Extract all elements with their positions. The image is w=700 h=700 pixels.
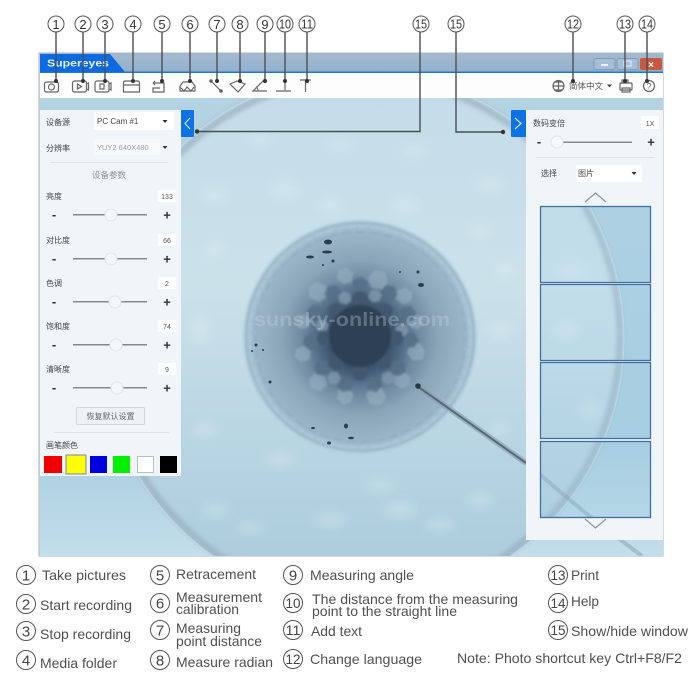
callout 6 <box>182 16 198 83</box>
legend 3: Stop recording <box>40 626 131 642</box>
callout 3 <box>97 16 113 83</box>
callout 11 <box>299 16 315 83</box>
panel: left camera settings <box>40 110 181 476</box>
toolbar <box>40 73 663 98</box>
callout 15 left: 15 <box>415 16 427 32</box>
legend 3 <box>16 622 131 642</box>
legend 6: Measurement <box>176 589 262 605</box>
icon: stop record <box>95 81 111 92</box>
legend 1: 1 <box>22 568 30 584</box>
legend 14 <box>548 593 599 612</box>
legend 3: 3 <box>22 624 30 640</box>
icon: folder <box>124 81 140 92</box>
icon: point distance <box>210 80 222 92</box>
callout 6: 6 <box>186 17 194 32</box>
slider: brightness: + <box>163 208 171 222</box>
legend 9 <box>284 566 414 584</box>
slider: hue: 色调 <box>46 278 62 288</box>
legend 12: 12 <box>286 651 301 667</box>
legend 6: 6 <box>156 596 164 612</box>
legend 2: 2 <box>22 596 30 614</box>
legend 11: Add text <box>311 623 362 639</box>
thumbnail 3 <box>540 362 650 438</box>
slider: sharpness: - <box>52 380 56 395</box>
legend 4: Media folder <box>40 655 117 671</box>
slider: contrast <box>46 234 176 266</box>
slider: saturation <box>46 320 176 352</box>
legend 5: Retracement <box>176 566 256 582</box>
button: hide left panel <box>181 110 194 137</box>
legend 2: Start recording <box>40 597 132 613</box>
callout 4: 4 <box>129 17 137 32</box>
window buttons <box>594 58 662 71</box>
egg cell <box>243 220 477 454</box>
legend 1 <box>16 566 126 584</box>
slider: sharpness: 9 <box>165 367 169 374</box>
logo tab <box>40 54 125 72</box>
resolution row: 分辨率 <box>46 143 70 153</box>
icon: record <box>72 81 88 92</box>
legend 7: Measuring <box>176 620 241 636</box>
slider: contrast: 对比度 <box>46 235 70 245</box>
icon: retracement <box>153 81 164 92</box>
callout 7 <box>209 16 225 83</box>
panel: right zoom and gallery <box>526 110 663 540</box>
select media type: 图片 <box>578 168 594 178</box>
select media type <box>541 165 642 182</box>
callout 9: 9 <box>261 17 269 32</box>
callout 5: 5 <box>158 17 166 32</box>
pen colour swatches: 画笔颜色 <box>46 440 78 450</box>
callout 10: 10 <box>279 16 291 32</box>
chevron up <box>585 193 606 202</box>
select media type: 选择 <box>541 168 557 178</box>
callout 15 left <box>195 16 429 134</box>
device source row: PC Cam #1 <box>97 117 139 126</box>
reset button <box>76 408 144 424</box>
section heading: 设备参数 <box>92 170 126 180</box>
legend <box>16 566 689 671</box>
callout 14: 14 <box>641 16 653 32</box>
legend 6: calibration <box>176 601 239 617</box>
icon: camera <box>44 82 58 92</box>
legend 10: 10 <box>286 595 301 611</box>
callout 5 <box>154 16 170 83</box>
dark facets <box>302 275 421 395</box>
callout 10 <box>277 16 293 83</box>
slider: brightness: - <box>52 207 56 222</box>
icon: help <box>644 80 654 92</box>
slider: contrast: 66 <box>163 238 171 245</box>
legend 15: 15 <box>550 622 566 638</box>
legend 11 <box>284 620 362 640</box>
watermark: sunsky-online.com <box>254 310 450 331</box>
legend 9: 9 <box>289 568 297 584</box>
slider: hue: + <box>163 294 171 310</box>
mid facets <box>293 266 427 410</box>
callout 8: 8 <box>236 17 244 32</box>
callout 2: 2 <box>79 17 87 32</box>
digital zoom <box>533 116 659 150</box>
legend 10 <box>284 591 518 619</box>
needle ghost behind gallery <box>526 463 642 556</box>
slider: brightness <box>46 190 176 222</box>
legend 6 <box>150 589 262 617</box>
digital zoom: - <box>537 134 541 149</box>
legend 14: Help <box>571 593 599 609</box>
resolution row: YUY2 640X480 <box>97 143 149 152</box>
icon: line distance <box>276 81 291 91</box>
slider: sharpness: + <box>163 380 171 396</box>
reset button: 恢复默认设置 <box>86 411 134 421</box>
slider: contrast: - <box>52 251 56 266</box>
legend 12 <box>284 650 422 668</box>
digital zoom: 1X <box>646 121 655 128</box>
legend 12: Change language <box>310 651 422 667</box>
legend 10: point to the straight line <box>312 603 457 619</box>
legend 8: 8 <box>156 652 164 670</box>
callout 2 <box>75 16 91 83</box>
software window <box>39 53 663 603</box>
pale texture patches <box>190 134 600 533</box>
callout 9 <box>257 16 273 83</box>
callout 4 <box>125 16 141 83</box>
button: hide right panel <box>511 110 526 137</box>
logo tab: Supereyes <box>47 58 109 70</box>
shortcut note: Note: Photo shortcut key Ctrl+F8/F2 <box>457 650 682 666</box>
dish rim <box>139 98 624 556</box>
callout 1: 1 <box>52 17 60 32</box>
callout 13: 13 <box>619 16 631 32</box>
slider: saturation: - <box>52 337 56 352</box>
thumbnail 4 <box>540 442 650 518</box>
icon: angle <box>253 80 267 91</box>
callouts: toolbar numbers with leader lines <box>48 16 655 134</box>
thumbnail 2 <box>540 284 650 360</box>
slider: brightness: 133 <box>161 194 173 201</box>
slider: sharpness: 清晰度 <box>46 364 70 374</box>
microscope photo <box>40 98 663 556</box>
slider: brightness: 亮度 <box>46 191 62 201</box>
legend 15: Show/hide window <box>571 623 689 639</box>
slider: saturation: 74 <box>163 324 171 331</box>
callout 12: 12 <box>567 16 579 32</box>
callout 1 <box>48 16 64 83</box>
callout 3: 3 <box>101 17 109 32</box>
legend 10: The distance from the measuring <box>312 591 518 607</box>
thumbnail 1 <box>540 206 650 282</box>
slider: contrast: + <box>163 252 171 266</box>
window buttons: × <box>648 60 654 71</box>
slider: saturation: 饱和度 <box>46 321 70 331</box>
slider: sharpness <box>46 363 176 396</box>
digital zoom: + <box>647 134 655 150</box>
legend 15 <box>548 620 689 640</box>
icon: help: ? <box>646 82 652 92</box>
slider: hue <box>46 277 176 310</box>
legend 7 <box>150 620 262 649</box>
icon: globe <box>553 80 564 92</box>
legend 13: Print <box>571 567 599 583</box>
legend 4 <box>16 650 117 671</box>
callout 13 <box>617 16 633 83</box>
icon: printer <box>620 80 632 92</box>
callout 7: 7 <box>213 17 221 32</box>
legend 9: Measuring angle <box>310 567 414 583</box>
language label: 简体中文 <box>569 81 603 91</box>
title bar <box>40 53 663 73</box>
legend 11: 11 <box>286 622 301 638</box>
callout 15 right <box>448 16 505 134</box>
slider: hue: - <box>52 294 56 309</box>
resolution row <box>46 139 168 155</box>
chevron down <box>585 519 606 528</box>
callout 11: 11 <box>301 16 313 32</box>
callout 14 <box>639 16 655 83</box>
injection needle <box>415 383 526 463</box>
legend 8 <box>150 650 273 670</box>
legend 4: 4 <box>22 652 30 670</box>
legend 7: point distance <box>176 633 262 649</box>
pen colour swatches <box>44 440 177 474</box>
icon: add text <box>300 80 311 92</box>
device source row <box>46 112 174 130</box>
legend 2 <box>16 594 132 614</box>
callout 15 right: 15 <box>450 16 462 32</box>
device source row: 设备源 <box>46 117 70 127</box>
legend 1: Take pictures <box>42 567 126 583</box>
legend 5 <box>150 566 256 584</box>
legend 13: 13 <box>550 567 566 583</box>
legend 8: Measure radian <box>176 654 273 670</box>
legend 13 <box>548 566 599 584</box>
callout 12 <box>565 16 581 83</box>
slider: saturation: + <box>163 338 171 352</box>
icon: radian <box>230 81 245 92</box>
callout 8 <box>232 16 248 83</box>
legend 5: 5 <box>156 568 164 584</box>
legend 7: 7 <box>156 622 164 640</box>
slider: hue: 2 <box>165 281 169 288</box>
digital zoom: 数码变倍 <box>533 118 565 128</box>
legend 14: 14 <box>550 595 566 611</box>
dark granules <box>251 240 424 444</box>
icon: calibration <box>180 82 195 91</box>
